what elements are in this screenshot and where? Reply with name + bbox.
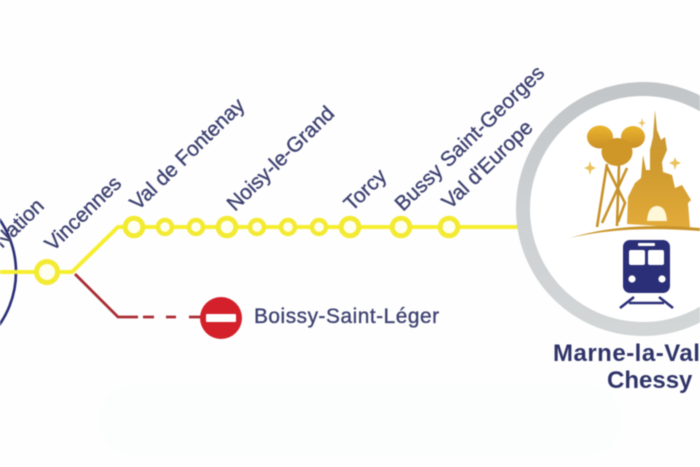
label: Torcy: Torcy — [339, 164, 392, 216]
terminus label — [553, 340, 700, 394]
label: Bussy Saint-Georges: Bussy Saint-Georges — [390, 61, 549, 216]
intermediate station — [281, 220, 295, 234]
Nation interchange ring — [0, 180, 16, 364]
yellow line with stations — [0, 218, 518, 282]
station: Torcy — [341, 218, 359, 236]
intermediate station — [250, 220, 264, 234]
terminus ring — [523, 89, 700, 329]
station: Vincennes — [36, 262, 58, 282]
station: Val de Fontenay — [125, 218, 143, 236]
label: Noisy-le-Grand: Noisy-le-Grand — [222, 102, 339, 216]
background tint — [100, 385, 620, 455]
castle gate — [647, 206, 667, 221]
label: Boissy-Saint-Léger: Boissy-Saint-Léger — [254, 305, 440, 328]
sparkles — [584, 118, 681, 175]
station: Bussy Saint-Georges — [392, 218, 410, 236]
icon: train — [620, 240, 673, 308]
ground arc — [570, 226, 700, 238]
intermediate station — [158, 220, 172, 234]
intermediate station — [312, 220, 326, 234]
castle — [627, 110, 691, 228]
intermediate station — [189, 220, 203, 234]
icon: Disney castle and studio tower — [570, 110, 700, 238]
label: Val d'Europe: Val d'Europe — [437, 116, 538, 214]
branch: Boissy-Saint-Léger — [75, 274, 440, 339]
icon: no entry — [200, 297, 242, 339]
station: Noisy-le-Grand — [218, 218, 236, 236]
red branch line — [75, 274, 138, 317]
label: Vincennes: Vincennes — [40, 172, 126, 256]
dashed section — [143, 316, 202, 318]
Chessy: Chessy — [607, 367, 693, 394]
studio tower — [587, 126, 645, 227]
line — [0, 227, 518, 272]
label: Val de Fontenay: Val de Fontenay — [125, 93, 250, 215]
station: Val d'Europe — [440, 218, 458, 236]
